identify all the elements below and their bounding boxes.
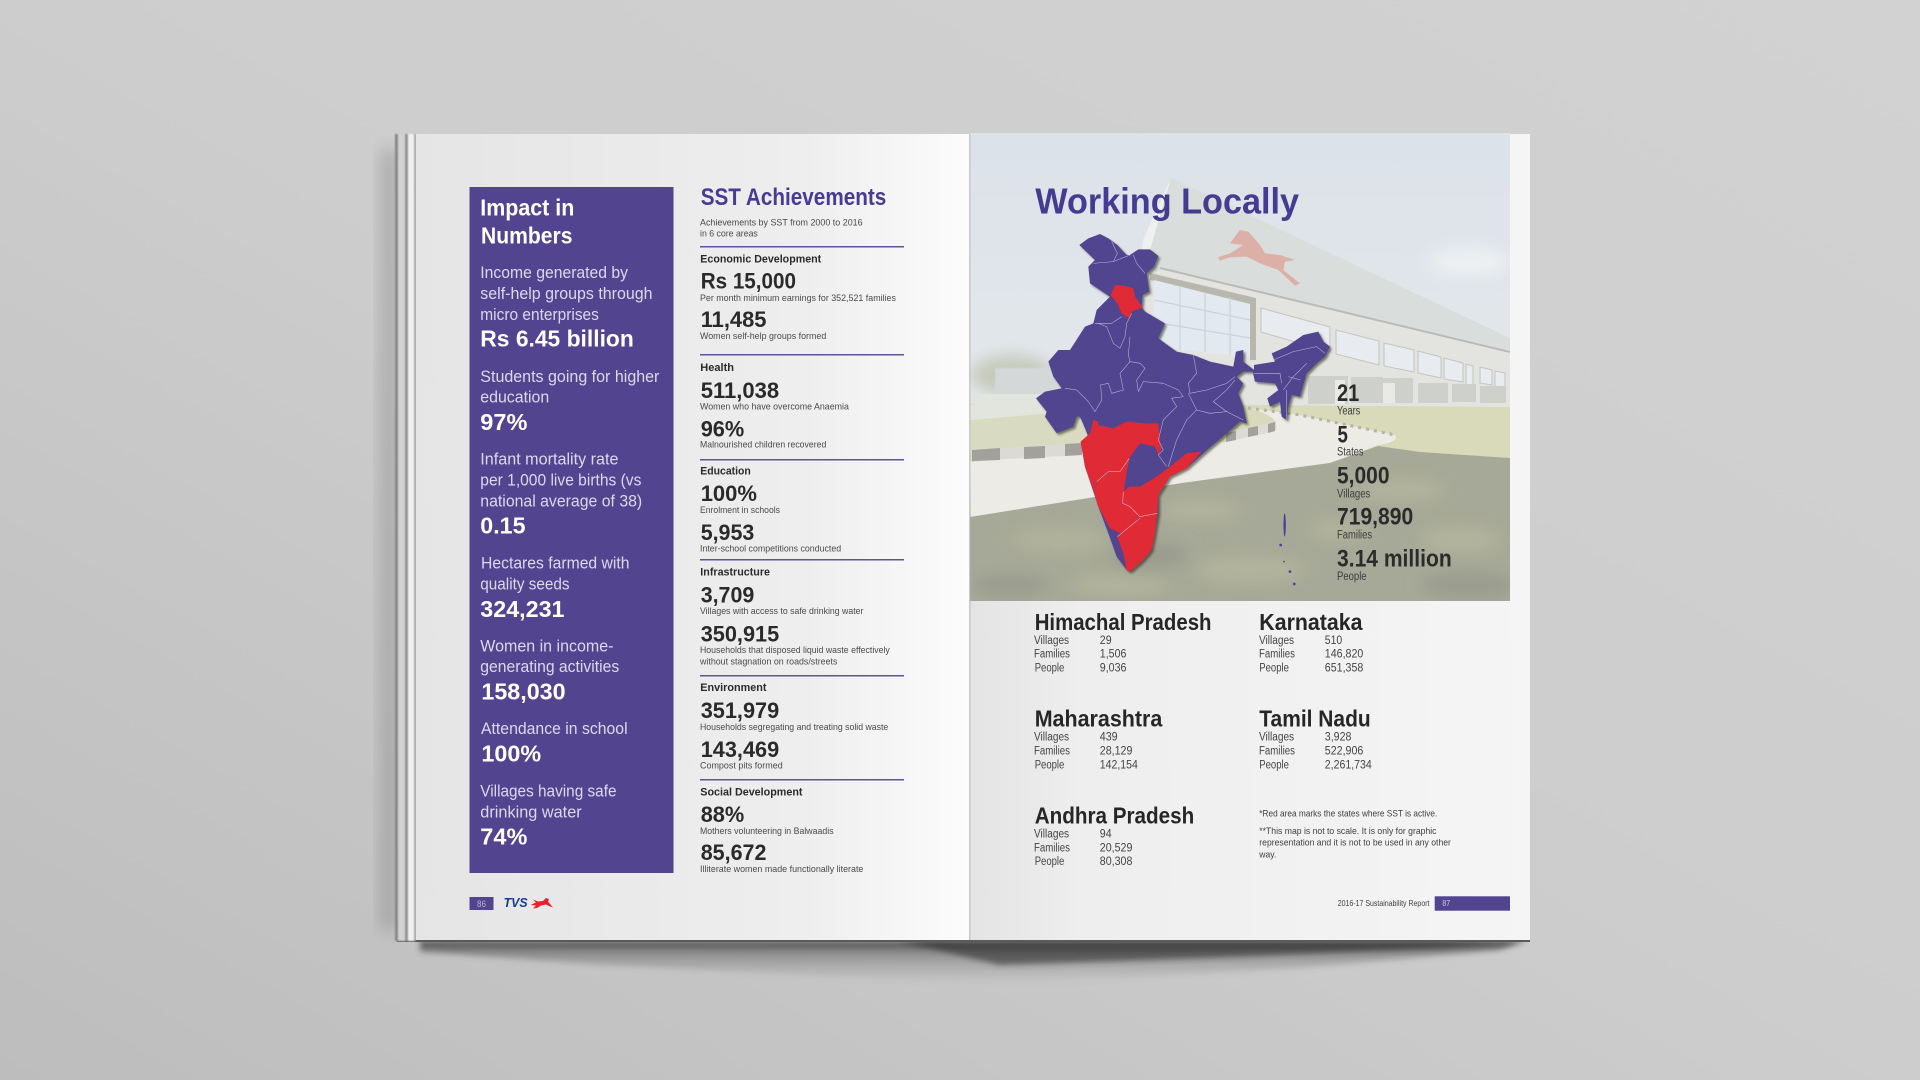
- state: Andhra Pradesh: 94: [1100, 829, 1112, 841]
- key figures: [1337, 380, 1452, 583]
- state: Tamil Nadu: 522,906: [1325, 746, 1363, 758]
- stat: women in income generation: 158,030: [481, 678, 566, 704]
- state: Andhra Pradesh: [1034, 802, 1194, 868]
- section: infrastructure: Villages with access to safe drinking water: [700, 606, 863, 617]
- state: Tamil Nadu: Families: [1259, 746, 1295, 758]
- state: Himachal Pradesh: 9,036: [1100, 663, 1126, 675]
- map of India: [1036, 234, 1330, 585]
- heading: impact in numbers: Numbers: [481, 222, 572, 248]
- photo: factory background: [970, 133, 1520, 601]
- state: Tamil Nadu: Villages: [1259, 732, 1294, 744]
- state: Andhra Pradesh: Andhra Pradesh: [1035, 802, 1194, 828]
- stat: income generated: self-help groups through: [480, 284, 652, 303]
- stat: attendance: Attendance in school: [481, 719, 628, 738]
- stat: women in income generation: [480, 636, 619, 704]
- state: Maharashtra: 142,154: [1100, 759, 1138, 771]
- section: environment: 351,979: [701, 698, 779, 723]
- footnotes: representation and it is not to be used in any other: [1259, 837, 1451, 848]
- section: economic development: Rs 15,000: [701, 269, 796, 294]
- heading: SST achievements: SST Achievements: [701, 184, 886, 211]
- section: health: 96%: [701, 416, 744, 441]
- section: environment: Compost pits formed: [700, 760, 783, 771]
- state: Karnataka: Villages: [1259, 635, 1294, 647]
- section: education: Education: [700, 465, 751, 477]
- state: Tamil Nadu: 3,928: [1325, 732, 1351, 744]
- section: economic development: Per month minimum earnings for 352,521 families: [700, 293, 896, 304]
- section: education: 100%: [701, 481, 757, 506]
- right page footer: 2016-17 Sustainability Report: [1338, 898, 1430, 908]
- stat: women in income generation: generating activities: [480, 657, 619, 676]
- state: Karnataka: 651,358: [1325, 663, 1363, 675]
- section: health: 511,038: [701, 378, 779, 403]
- state: Andhra Pradesh: Families: [1034, 842, 1070, 854]
- stat: income generated: Rs 6.45 billion: [480, 326, 634, 352]
- state: Maharashtra: [1034, 706, 1162, 771]
- footnotes: **This map is not to scale. It is only for graphic: [1259, 826, 1437, 837]
- stat: attendance: [481, 719, 628, 767]
- section: social development: Illiterate women made functionally literate: [700, 864, 863, 875]
- section: social development: 85,672: [701, 840, 766, 865]
- stat: higher education: education: [480, 387, 549, 406]
- spine line: [969, 134, 970, 940]
- figure: families: [1337, 503, 1413, 541]
- section: health: Malnourished children recovered: [700, 440, 826, 451]
- stat: infant mortality: Infant mortality rate: [480, 450, 618, 468]
- glass facade: [1150, 273, 1256, 360]
- footnotes: way.: [1258, 849, 1276, 860]
- stat: income generated: [480, 263, 652, 352]
- section: health: [700, 354, 904, 451]
- figure: states: States: [1337, 447, 1364, 459]
- book shadow: [381, 150, 1530, 985]
- section: environment: 143,469: [701, 737, 779, 762]
- stat: hectares farmed: 324,231: [480, 596, 565, 622]
- inner grass patch: [1226, 410, 1276, 432]
- state: Karnataka: Karnataka: [1259, 609, 1363, 635]
- stat: higher education: 97%: [480, 409, 527, 435]
- stat: hectares farmed: [480, 553, 630, 622]
- figure: years: Years: [1337, 405, 1360, 417]
- state: Himachal Pradesh: Himachal Pradesh: [1035, 609, 1212, 635]
- section: education: Inter-school competitions conducted: [700, 544, 841, 555]
- section: social development: Mothers volunteering in Balwaadis: [700, 826, 834, 837]
- map: silhouette in blue: [1036, 234, 1330, 572]
- map: state borders: [1065, 242, 1325, 537]
- state: Himachal Pradesh: [1034, 609, 1212, 675]
- stat: infant mortality: 0.15: [480, 512, 526, 538]
- state: Himachal Pradesh: 1,506: [1100, 649, 1126, 661]
- state: Maharashtra: Families: [1034, 746, 1070, 758]
- state: Andhra Pradesh: Villages: [1034, 829, 1069, 841]
- building: [1143, 178, 1510, 407]
- section: infrastructure: Households that disposed liquid waste effectively: [700, 645, 890, 656]
- state: Himachal Pradesh: 29: [1100, 635, 1112, 647]
- figure: villages: [1337, 462, 1390, 500]
- ground: [970, 405, 1510, 517]
- figure: families: 719,890: [1337, 503, 1413, 530]
- stat: infant mortality: national average of 38): [480, 491, 642, 510]
- left page footer: 86: [477, 899, 486, 909]
- section: economic development: [700, 246, 904, 342]
- stat: income generated: Income generated by: [480, 263, 628, 282]
- section: environment: [700, 675, 904, 771]
- stat: women in income generation: Women in income-: [480, 636, 614, 655]
- section: economic development: Women self-help groups formed: [700, 331, 826, 342]
- section: environment: Households segregating and treating solid waste: [700, 722, 888, 733]
- state: Tamil Nadu: 2,261,734: [1325, 759, 1372, 771]
- section: infrastructure: 350,915: [701, 621, 779, 646]
- ribbon windows: [1260, 308, 1506, 386]
- stat: infant mortality: [480, 450, 642, 538]
- state: Andhra Pradesh: 20,529: [1100, 842, 1132, 854]
- section: infrastructure: [699, 559, 904, 668]
- figure: states: [1337, 421, 1364, 459]
- intro text: in 6 core areas: [700, 229, 758, 240]
- ground floor windows: [1308, 376, 1506, 404]
- state: Karnataka: [1259, 609, 1363, 675]
- state: Maharashtra: Villages: [1034, 732, 1069, 744]
- state: Andhra Pradesh: 80,308: [1100, 856, 1132, 868]
- state: Tamil Nadu: People: [1259, 759, 1289, 771]
- state: Maharashtra: 28,129: [1100, 746, 1132, 758]
- curbs: [971, 422, 1275, 461]
- logo: TVS: TVS: [504, 895, 528, 910]
- section: economic development: 11,485: [701, 307, 766, 332]
- state: Maharashtra: 439: [1100, 732, 1118, 744]
- section: infrastructure: 3,709: [701, 582, 754, 607]
- map: active states in red: [1081, 285, 1202, 572]
- figure: states: 5: [1338, 421, 1348, 448]
- right page footer: 87: [1442, 898, 1450, 908]
- figure: people: People: [1337, 571, 1367, 583]
- panel: impact in numbers: [470, 187, 674, 873]
- state: Himachal Pradesh: Families: [1034, 649, 1070, 661]
- intro text: [700, 217, 863, 240]
- right page: [970, 134, 1530, 940]
- stat: attendance: 100%: [481, 741, 541, 767]
- section: social development: Social Development: [700, 786, 803, 798]
- section: education: 5,953: [701, 520, 754, 545]
- stat: hectares farmed: Hectares farmed with: [481, 553, 630, 572]
- heading: impact in numbers: Impact in: [480, 194, 574, 220]
- figure: years: 21: [1337, 380, 1359, 407]
- section: infrastructure: Infrastructure: [700, 567, 770, 579]
- curved road: [970, 408, 1396, 517]
- state: Karnataka: Families: [1259, 649, 1295, 661]
- stat: higher education: [480, 367, 660, 435]
- left page footer: [470, 895, 553, 910]
- figure: families: Families: [1337, 529, 1372, 541]
- stat: infant mortality: per 1,000 live births (vs: [480, 470, 641, 489]
- book page stack edge: [395, 134, 416, 941]
- heading: impact in numbers: [480, 194, 574, 248]
- figure: people: [1337, 546, 1452, 583]
- stat: safe drinking water: [480, 782, 616, 850]
- state: Himachal Pradesh: Villages: [1034, 635, 1069, 647]
- heading: working locally: Working Locally: [1035, 180, 1299, 221]
- stat: safe drinking water: 74%: [480, 824, 527, 850]
- logo: lion on building: [1218, 230, 1300, 286]
- section: environment: Environment: [700, 682, 767, 694]
- stat: income generated: micro enterprises: [480, 305, 599, 324]
- section: education: [700, 459, 904, 554]
- state: Tamil Nadu: Tamil Nadu: [1259, 706, 1371, 732]
- state: Maharashtra: Maharashtra: [1035, 706, 1162, 732]
- shaded lawn: [970, 446, 1520, 601]
- intro text: Achievements by SST from 2000 to 2016: [700, 217, 863, 228]
- left page: [416, 134, 970, 940]
- section: economic development: Economic Development: [700, 253, 822, 265]
- figure: people: 3.14 million: [1337, 546, 1452, 573]
- footnotes: *Red area marks the states where SST is active.: [1259, 809, 1437, 820]
- stat: higher education: Students going for higher: [480, 367, 660, 386]
- section: social development: [700, 779, 904, 875]
- section: health: Women who have overcome Anaemia: [700, 402, 850, 413]
- section: health: Health: [700, 362, 734, 374]
- state: Tamil Nadu: [1259, 706, 1372, 771]
- state: Karnataka: 510: [1325, 635, 1342, 647]
- figure: villages: 5,000: [1337, 462, 1390, 489]
- stat: safe drinking water: drinking water: [480, 802, 582, 821]
- stat: hectares farmed: quality seeds: [480, 574, 570, 593]
- state: Andhra Pradesh: People: [1035, 856, 1064, 868]
- figure: villages: Villages: [1337, 488, 1370, 500]
- state: Karnataka: 146,820: [1325, 649, 1363, 661]
- section: education: Enrolment in schools: [700, 505, 780, 516]
- right page footer: [1338, 896, 1510, 911]
- stat: safe drinking water: Villages having safe: [480, 782, 616, 801]
- section: infrastructure: without stagnation on roads/streets: [699, 657, 838, 668]
- left grass and curb: [970, 404, 1088, 452]
- state: Maharashtra: People: [1035, 759, 1064, 771]
- state: Himachal Pradesh: People: [1035, 663, 1064, 675]
- figure: years: [1337, 380, 1360, 417]
- state: Karnataka: People: [1259, 663, 1289, 675]
- map: Andaman islands: [1279, 513, 1296, 585]
- section: social development: 88%: [701, 802, 744, 827]
- footnotes: [1258, 809, 1451, 860]
